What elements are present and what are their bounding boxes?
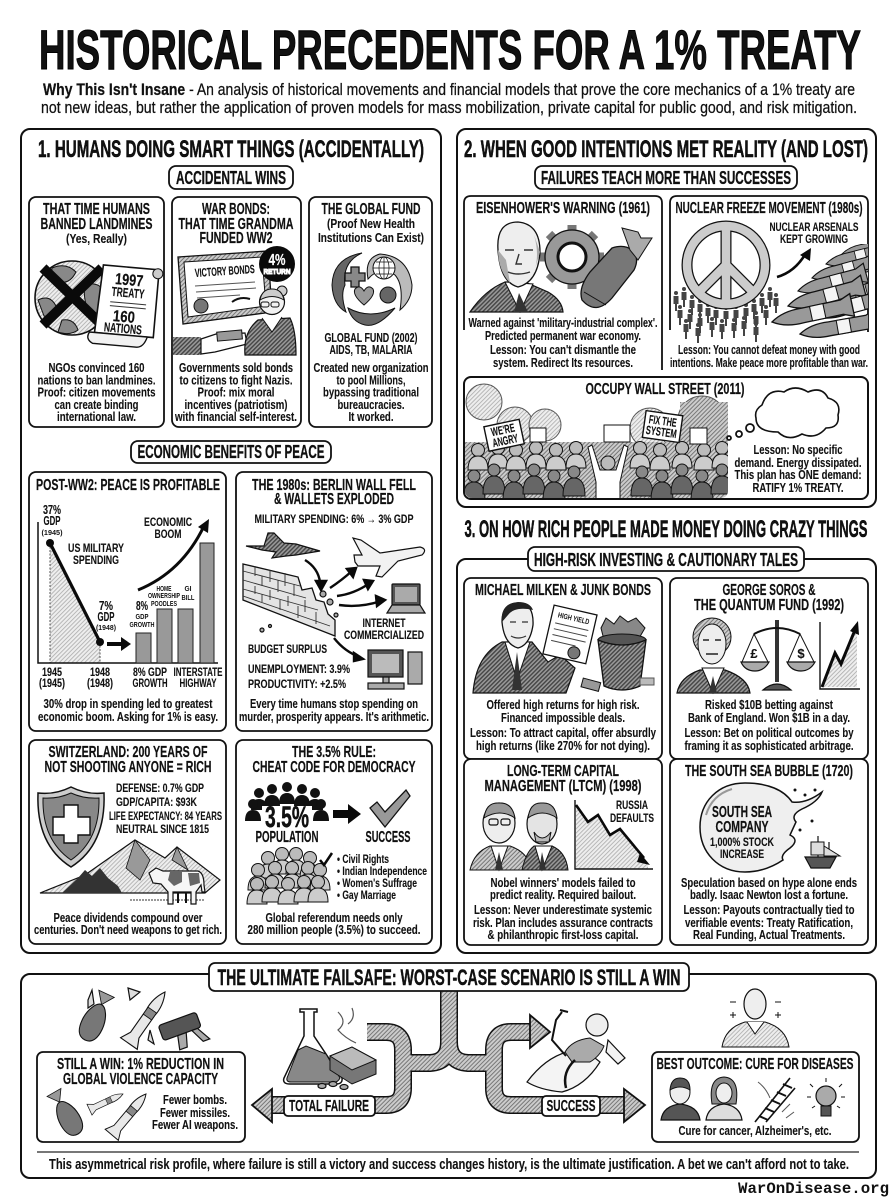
- card: global fund: THE GLOBAL FUND: [322, 201, 420, 218]
- sign: we're angry: ANGRY: [491, 431, 519, 450]
- card: berlin wall: INTERNET: [362, 616, 406, 630]
- card: still a win: GLOBAL VIOLENCE CAPACITY: [63, 1071, 218, 1088]
- card: nuclear freeze: [669, 195, 869, 370]
- icon: treaty scroll: 160: [112, 308, 136, 327]
- list: movements: • Gay Marriage: [337, 888, 396, 902]
- card: war bonds: Governments sold bonds: [179, 360, 293, 375]
- card: berlin wall: murder, prosperity appears. It's arithmetic.: [239, 709, 429, 724]
- chart: ltcm collapse: RUSSIA: [616, 798, 648, 812]
- card: switzerland: SWITZERLAND: 200 YEARS OF: [48, 744, 208, 761]
- card: war bonds: [172, 197, 301, 427]
- chart: military spending and boom: GROWTH: [130, 620, 154, 629]
- icon: trash can of money: [581, 616, 654, 691]
- card: ltcm: predict reality. Required bailout.: [490, 887, 636, 902]
- pill: success: [542, 1096, 600, 1116]
- panel: 1. humans doing smart things: [21, 129, 441, 953]
- icon: milken portrait: [473, 602, 575, 693]
- card: global fund: (Proof New Health: [327, 216, 415, 231]
- card: landmines: [29, 197, 164, 427]
- card: nuclear freeze: KEPT GROWING: [780, 232, 848, 246]
- card: ltcm: & philanthropic first-loss capital.: [488, 927, 638, 942]
- card: 3.5% rule: SUCCESS: [366, 829, 411, 846]
- arrow: arsenals rising: [777, 248, 811, 277]
- card: george soros: [670, 578, 868, 759]
- icon: bursting bubble: COMPANY: [716, 819, 769, 836]
- card: switzerland: Peace dividends compound over: [54, 910, 202, 925]
- card: berlin wall: COMMERCIALIZED: [344, 628, 424, 642]
- card: global fund: AIDS, TB, MALARIA: [330, 342, 413, 357]
- panel heading 1: 1. HUMANS DOING SMART THINGS (ACCIDENTALLY): [38, 136, 424, 163]
- icon: bursting bubble: SOUTH SEA: [712, 804, 772, 821]
- chart: military spending and boom: 8%: [136, 598, 148, 613]
- card: berlin wall: & WALLETS EXPLODED: [274, 491, 394, 508]
- card: 3.5% rule: [236, 740, 432, 944]
- chart: military spending and boom: BILL: [182, 593, 195, 602]
- card: ltcm: LONG-TERM CAPITAL: [507, 763, 619, 780]
- card: ltcm: MANAGEMENT (LTCM) (1998): [484, 778, 642, 795]
- icon: recovering patient: [527, 1010, 625, 1092]
- chart: military spending and boom: [38, 502, 222, 690]
- icon: protest crowd: [674, 287, 778, 343]
- icon: bursting bubble: [700, 783, 822, 872]
- icon: swiss shield: [38, 787, 104, 867]
- card: global fund: It worked.: [348, 409, 394, 424]
- chart: military spending and boom: SPENDING: [73, 553, 119, 567]
- card: post-ww2 chart: [29, 472, 226, 731]
- card: global fund: bypassing traditional: [323, 384, 419, 400]
- card: still a win: [37, 1052, 245, 1142]
- card: ltcm: risk. Plan includes assurance contracts: [473, 915, 653, 930]
- card: global fund: [309, 197, 432, 427]
- chart: military spending and boom: (1948): [96, 623, 116, 632]
- card: eisenhower: Warned against 'military-industrial complex'.: [468, 315, 658, 330]
- card: ltcm: Nobel winners' models failed to: [490, 875, 636, 890]
- card: landmines: nations to ban landmines.: [38, 372, 156, 388]
- icon: reduced weapons: [45, 1087, 153, 1140]
- stat: 3.5%: 3.5%: [265, 801, 309, 834]
- card: 3.5% rule: THE 3.5% RULE:: [292, 744, 376, 761]
- card: berlin wall: PRODUCTIVITY: +2.5%: [248, 677, 346, 691]
- icon: balance scales: £: [750, 646, 758, 661]
- icon: eisenhower portrait: [470, 222, 563, 312]
- card: ltcm: [464, 759, 662, 945]
- chart: military spending and boom: BOOM: [154, 527, 182, 541]
- icon: high yield document: HIGH YIELD: [557, 610, 591, 626]
- pill: total failure: [284, 1096, 375, 1116]
- icon: high yield document: [543, 605, 597, 664]
- icon: gear: [540, 225, 604, 289]
- chart: military spending and boom: INTERSTATE: [174, 665, 222, 679]
- card: war bonds: to citizens to fight Nazis.: [180, 372, 292, 388]
- subtitle text block: [41, 81, 857, 117]
- pill: ultimate failsafe heading: [209, 963, 689, 991]
- icon: victory bond certificate: VICTORY BONDS: [194, 262, 255, 280]
- card: switzerland: [29, 740, 226, 944]
- icon: laptop: [387, 584, 425, 613]
- icon: bursting bubble: 1,000% STOCK: [710, 835, 774, 849]
- card: eisenhower: Predicted permanent war economy.: [485, 328, 641, 343]
- icon: treaty scroll: TREATY: [111, 284, 145, 302]
- card: war bonds: FUNDED WW2: [200, 230, 273, 247]
- icon: 4% return badge: 4%: [268, 252, 286, 269]
- card: still a win: STILL A WIN: 1% REDUCTION IN: [57, 1056, 224, 1073]
- icon: missile stockpile: [770, 244, 868, 338]
- card: switzerland: LIFE EXPECTANCY: 84 YEARS: [109, 809, 222, 823]
- chart: military spending and boom: 1948: [90, 665, 110, 679]
- card: occupy wall street: Lesson: No specific: [754, 442, 842, 457]
- icon: population silhouettes: [245, 782, 329, 821]
- icon: money stack and pills: [318, 1047, 376, 1090]
- chart: military spending and boom: GI: [184, 584, 192, 593]
- card: still a win: Fewer missiles.: [160, 1105, 230, 1120]
- card: berlin wall: Every time humans stop spending on: [250, 696, 418, 711]
- chart: military spending and boom: GDP: [98, 609, 115, 624]
- card: switzerland: NEUTRAL SINCE 1815: [116, 822, 209, 836]
- card: switzerland: NOT SHOOTING ANYONE = RICH: [44, 759, 212, 776]
- footer url: WarOnDisease.org: [738, 1180, 889, 1198]
- card: war bonds: THAT TIME GRANDMA: [178, 216, 294, 233]
- chart: military spending and boom: OWNERSHIP: [148, 591, 180, 600]
- card: landmines: international law.: [57, 409, 136, 424]
- icon: fighter jet: [246, 533, 320, 558]
- card: landmines: THAT TIME HUMANS: [43, 201, 150, 218]
- chart: ltcm collapse: [575, 798, 654, 869]
- icon: alps: [40, 840, 220, 900]
- sign: fix the system: FIX THE: [648, 412, 678, 430]
- icon: passenger plane: [353, 538, 425, 577]
- icon: girl: [706, 1077, 742, 1120]
- card: landmines: (Yes, Really): [66, 231, 127, 246]
- arrow: to success: [333, 804, 361, 824]
- icon: dna strand: [755, 1078, 795, 1122]
- icon: treaty scroll: [87, 263, 163, 349]
- card: 3.5% rule: POPULATION: [256, 829, 318, 846]
- panel: ultimate failsafe: [21, 963, 876, 1178]
- card: berlin wall: UNEMPLOYMENT: 3.9%: [248, 662, 350, 676]
- icon: grandma buying bond: [173, 286, 296, 355]
- card: landmines: can create binding: [54, 397, 139, 412]
- card: south sea bubble: [670, 759, 868, 945]
- card: post-ww2 chart: 30% drop in spending led to greatest: [44, 696, 213, 711]
- chart: military spending and boom: (1948): [87, 676, 113, 690]
- icon: 4% return badge: RETURN: [264, 267, 290, 276]
- card: global fund: Created new organization: [314, 360, 429, 375]
- card: berlin wall: [236, 472, 432, 731]
- icon: balance scales: [741, 620, 815, 690]
- pill: failures teach: [535, 166, 797, 189]
- icon: crumbling brick wall: [243, 564, 338, 636]
- chart: military spending and boom: 1945: [42, 665, 62, 679]
- card: landmines: BANNED LANDMINES: [40, 216, 153, 233]
- card: post-ww2 chart: economic boom. Asking for 1% is easy.: [38, 709, 218, 724]
- card: michael milken: high returns (like 270% for not dying).: [476, 738, 650, 753]
- icon: failed experiment flask: [284, 1008, 356, 1084]
- card: landmines: Proof: citizen movements: [38, 384, 156, 400]
- card: south sea bubble: Real Funding, Actual Treatments.: [693, 927, 845, 942]
- card: war bonds: with financial self-interest.: [174, 409, 297, 424]
- icon: global fund logo: [332, 253, 412, 325]
- icon: crossed-out globe: [35, 261, 109, 335]
- list: movements: • Indian Independence: [337, 864, 427, 878]
- pill: economic benefits of peace: [131, 441, 331, 463]
- icon: lightbulb: [807, 1078, 845, 1116]
- card: ltcm: Lesson: Never underestimate systemic: [474, 902, 652, 917]
- icon: desktop computer: [368, 650, 422, 689]
- illustration: occupy protest scene: [463, 384, 733, 500]
- chart: military spending and boom: GDP: [136, 612, 148, 621]
- icon: peace sign: [687, 226, 765, 304]
- icon: bursting bubble: INCREASE: [720, 847, 764, 861]
- card: war bonds: WAR BONDS:: [202, 201, 270, 218]
- card: george soros: GEORGE SOROS &: [722, 582, 816, 599]
- card: best outcome: [652, 1052, 859, 1142]
- card: global fund: to pool Millions,: [336, 372, 406, 388]
- card: global fund: Institutions Can Exist): [318, 230, 424, 245]
- card: michael milken: [464, 578, 662, 759]
- sign: we're angry: WE'RE: [490, 421, 516, 439]
- panel: 2. good intentions met reality: [457, 129, 896, 507]
- icon: destroyed weapons: [75, 986, 210, 1054]
- list: movements: [337, 852, 427, 902]
- card: eisenhower: Lesson: You can't dismantle the: [490, 342, 636, 357]
- card: war bonds: Proof: mix moral: [198, 384, 274, 400]
- chart: military spending and boom: GDP: [44, 513, 61, 528]
- chart: military spending and boom: HOME: [156, 584, 172, 593]
- chart: military spending and boom: ECONOMIC: [144, 515, 192, 529]
- icon: empty thought bubble: [727, 388, 839, 440]
- card: eisenhower: system. Redirect Its resources.: [493, 355, 633, 370]
- card: 3.5% rule: 280 million people (3.5%) to succeed.: [248, 922, 420, 937]
- card: post-ww2 chart: POST-WW2: PEACE IS PROFITABLE: [36, 477, 220, 494]
- icon: ltcm partners: [470, 803, 568, 870]
- icon: bomb: [581, 228, 652, 308]
- icon: boy: [661, 1078, 700, 1120]
- sign: fix the system: SYSTEM: [645, 423, 678, 441]
- card: global fund: bureaucracies.: [338, 397, 404, 412]
- icon: cow: [149, 868, 205, 904]
- sign: we're angry: [484, 419, 524, 451]
- card: berlin wall: THE 1980s: BERLIN WALL FELL: [252, 477, 416, 494]
- icon: victory bond certificate: [178, 251, 272, 324]
- card: still a win: Fewer bombs.: [163, 1092, 227, 1107]
- chart: military spending and boom: 7%: [99, 598, 113, 613]
- card: michael milken: Financed impossible deals.: [501, 710, 625, 725]
- card: nuclear freeze: NUCLEAR ARSENALS: [770, 220, 858, 234]
- icon: sailing ship: [805, 836, 840, 868]
- card: michael milken: MICHAEL MILKEN & JUNK BONDS: [475, 582, 651, 599]
- pill: economic benefits of peace: ECONOMIC BENEFITS OF PEACE: [138, 441, 324, 462]
- stat: 3.5%: [262, 801, 312, 834]
- chart: military spending and boom: US MILITARY: [68, 541, 124, 555]
- chart: military spending and boom: GROWTH: [132, 676, 168, 690]
- card: eisenhower: EISENHOWER'S WARNING (1961): [476, 200, 650, 217]
- arrows: conversion to civilian: [305, 560, 385, 661]
- chart: military spending and boom: HIGHWAY: [180, 676, 216, 690]
- icon: balance scales: $: [797, 646, 805, 661]
- pill: high-risk investing: [528, 547, 804, 571]
- card: berlin wall: BUDGET SURPLUS: [248, 642, 327, 656]
- card: berlin wall: MILITARY SPENDING: 6% → 3% GDP: [254, 512, 414, 526]
- card: global fund: GLOBAL FUND (2002): [324, 330, 418, 345]
- card: still a win: Fewer AI weapons.: [152, 1117, 238, 1132]
- icon: 4% return badge: [259, 246, 295, 282]
- flow arrows: failure and success branches: [252, 990, 645, 1122]
- card: switzerland: centuries. Don't need weapons to get rich.: [34, 922, 222, 937]
- card: switzerland: GDP/CAPITA: $93K: [116, 795, 197, 809]
- card: best outcome: Cure for cancer, Alzheimer's, etc.: [678, 1123, 832, 1138]
- pill: accidental wins: ACCIDENTAL WINS: [176, 167, 286, 188]
- icon: soros portrait: [677, 618, 750, 693]
- pill: accidental wins: [169, 166, 293, 189]
- chart: military spending and boom: 37%: [43, 502, 61, 517]
- chart: ltcm collapse: DEFAULTS: [610, 811, 654, 825]
- card: michael milken: Offered high returns for high risk.: [486, 697, 640, 712]
- icon: treaty scroll: NATIONS: [103, 319, 143, 338]
- card: war bonds: incentives (patriotism): [184, 397, 288, 412]
- sign: fix the system: [642, 411, 683, 443]
- chart: rising line: [820, 621, 860, 689]
- icon: crowd: [247, 848, 332, 904]
- card: occupy wall street: OCCUPY WALL STREET (2011): [586, 381, 744, 398]
- icon: treaty scroll: 1997: [114, 271, 144, 290]
- card: occupy wall street: [463, 377, 868, 500]
- card: 3.5% rule: Global referendum needs only: [266, 910, 403, 925]
- card: eisenhower: [464, 196, 662, 370]
- icon: cured man: [722, 989, 789, 1047]
- pill: total failure: TOTAL FAILURE: [289, 1098, 369, 1115]
- card: george soros: Risked $10B betting against: [705, 697, 833, 712]
- icon: check mark: [370, 790, 410, 827]
- card: 3.5% rule: CHEAT CODE FOR DEMOCRACY: [252, 759, 416, 776]
- chart: military spending and boom: 8% GDP: [133, 665, 167, 679]
- pill: success: SUCCESS: [546, 1098, 596, 1115]
- card: michael milken: Lesson: To attract capital, offer absurdly: [470, 725, 657, 740]
- card: landmines: NGOs convinced 160: [48, 360, 144, 375]
- card: switzerland: DEFENSE: 0.7% GDP: [116, 781, 204, 795]
- list: movements: • Civil Rights: [337, 852, 389, 866]
- list: movements: • Women's Suffrage: [337, 876, 417, 890]
- card: occupy wall street: RATIFY 1% TREATY.: [752, 480, 844, 495]
- panel: 3. high-risk investing: [457, 547, 876, 953]
- chart: military spending and boom: POODLES: [151, 599, 177, 608]
- chart: military spending and boom: (1945): [39, 676, 65, 690]
- chart: military spending and boom: (1945): [42, 528, 63, 537]
